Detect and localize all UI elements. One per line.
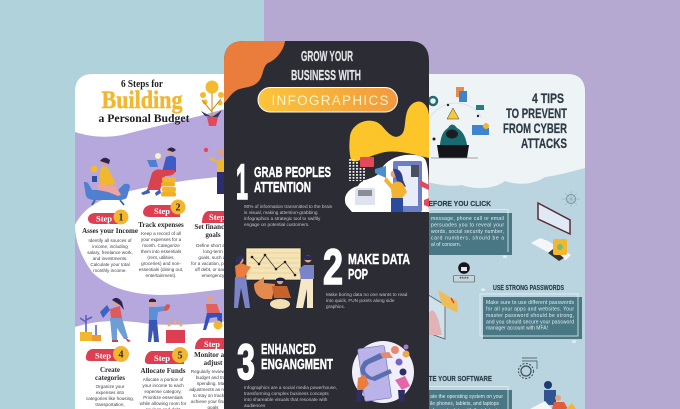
section 1 body text: 90% of information transmitted to the brain (244, 204, 333, 209)
illustration: woman with megaphone and phone (345, 155, 429, 212)
section 1 number and heading: GRAB PEOPLES (254, 164, 331, 181)
tip box: think before you click: message, phone call or email (431, 216, 504, 222)
illustration: woman with plants (80, 298, 131, 342)
step 2 text: groceries) and non- (141, 261, 181, 266)
title: grow your business with: BUSINESS WITH (291, 67, 361, 84)
step 4 text: Create (100, 366, 120, 374)
step 4 text: expenses into (96, 390, 125, 395)
tip box: think before you click: al of concern. (431, 242, 461, 248)
step 1 text: monthly income. (93, 268, 127, 273)
tip box: use strong passwords (480, 287, 582, 349)
tip box: use strong passwords: " (572, 339, 576, 349)
step 2 text: Keep a record of all (141, 231, 181, 236)
step 3 text: off debt, or saving (195, 267, 232, 272)
section 1 number and heading (236, 154, 331, 210)
step 5 text: Allocate Funds (141, 367, 186, 375)
step 5 text (140, 367, 187, 409)
tip box: use strong passwords: for all your apps and websites. Your (486, 306, 574, 312)
step 2 text: essentials (dining out, (139, 267, 183, 272)
step 3 text: goals, such as (198, 255, 228, 260)
step 1 badge: Step (96, 214, 112, 224)
title: 6 Steps for Building a Personal Budget: Building (102, 87, 183, 114)
panel: personal budget steps (75, 74, 237, 409)
icon: bulb (562, 191, 580, 207)
section 2 body text (326, 292, 408, 309)
step 2 text: Track expenses (138, 221, 184, 229)
step 4 badge: Step (95, 350, 111, 360)
section 1 number and heading: ATTENTION (254, 179, 311, 196)
step 6 badge (195, 338, 235, 349)
icon: gear (518, 358, 537, 378)
step 4 text: categories like housing, (86, 396, 134, 401)
illustration: monitor and laptop with lock (531, 203, 571, 261)
step 4 text: transportation, (95, 402, 125, 407)
step 6 text: achieve your financial (191, 399, 235, 404)
tip box: think before you click: card numbers, should be a (431, 236, 504, 242)
step 5 badge: 5 (178, 350, 182, 362)
illustration: person on coin (203, 296, 222, 330)
section 3 number and heading: 3 (237, 334, 255, 390)
title: 6 Steps for Building a Personal Budget: 6 Steps for (121, 79, 164, 90)
step 3 text: for a vacation, paying (191, 261, 235, 266)
step 3 badge: Step (209, 212, 225, 222)
section 1 body text: engage on potential customers. (244, 222, 309, 227)
step 4 text: Organize your (96, 384, 125, 389)
step 2 text: your expenses for a (141, 237, 182, 242)
step 1 text: Identify all sources of (88, 238, 132, 243)
step 4 badge (86, 346, 129, 362)
section 3 body text: audiences (244, 403, 266, 408)
step 4 badge: 4 (118, 350, 124, 360)
step 2 text: month. Categorize (142, 243, 180, 248)
panel: grow your business with infographics (224, 41, 429, 409)
illustration: hacker with laptop (429, 87, 489, 158)
step 2 text (138, 221, 184, 278)
step 6 badge: Step (204, 339, 220, 349)
step 2 badge: 2 (176, 202, 180, 214)
step 1 badge (88, 210, 128, 224)
step 1 text: Calculate your total (90, 262, 130, 267)
section 1 body text: infographics a strategic tool to swiftly (244, 216, 321, 221)
tip heading: use strong passwords: USE STRONG PASSWORDS (493, 285, 564, 292)
step 5 text: expense category. (144, 389, 182, 394)
tip heading: think before you click: THINK BEFORE YOU CLICK (401, 201, 491, 208)
step 5 text: your income to each (142, 383, 184, 388)
tip box: think before you click (412, 210, 512, 264)
section 1 number and heading: 1 (236, 154, 248, 210)
step 5 text: Prioritize essentials (143, 395, 183, 400)
step 6 text: to stay on track and (193, 393, 233, 398)
step 3 text: goals (205, 231, 221, 239)
icon: password lock (454, 262, 474, 283)
step 3 text: Set financial (194, 223, 232, 231)
step 2 text: entertainment). (146, 273, 176, 278)
step 5 text: while allowing room for (140, 401, 187, 406)
title: grow your business with (291, 48, 361, 84)
title: grow your business with: GROW YOUR (301, 48, 353, 65)
panel: cyber attack tips (401, 74, 585, 409)
step 6 text: adjust (204, 359, 223, 367)
section 1 body text: is visual, making attention-grabbing (244, 210, 318, 215)
orange corner blob (224, 41, 285, 103)
step 4 text: categories (95, 374, 125, 382)
title: 4 Tips to Prevent from Cyber Attacks: ATTACKS (521, 135, 567, 151)
title: 4 Tips to Prevent from Cyber Attacks: FROM CYBER (503, 120, 567, 136)
tip box: think before you click: persuades you to reveal your (431, 222, 504, 228)
illustration: woman on sofa (84, 158, 130, 205)
illustration: two people with line chart (234, 248, 314, 309)
section 3 number and heading (237, 334, 333, 390)
step 1 text: Asses your Income (82, 227, 138, 235)
step 6 text: budget and track (196, 375, 231, 380)
title pill: infographics (258, 88, 398, 112)
title: 4 Tips to Prevent from Cyber Attacks (503, 90, 567, 151)
tip box: update your software: ile phones, tablets, and laptops (430, 401, 499, 407)
icon: money plant (200, 80, 224, 126)
section 1 body text (244, 204, 333, 227)
step 1 badge: 1 (118, 212, 124, 224)
step 5 badge (145, 347, 188, 364)
title: 4 Tips to Prevent from Cyber Attacks: 4 TIPS (532, 90, 564, 106)
step 5 badge: Step (154, 353, 170, 363)
illustration: man with box of coins (148, 298, 185, 343)
step 3 text: emergency (202, 273, 225, 278)
step 1 text: and investments. (93, 256, 127, 261)
illustration: person with lightbulb (204, 148, 225, 194)
tip box: update your software (412, 386, 512, 409)
title pill: infographics: INFOGRAPHICS (272, 93, 388, 108)
section 3 body text: transforming complex business concepts (244, 391, 329, 396)
illustration: people with devices (530, 381, 576, 409)
step 5 text: Allocate a portion of (143, 377, 184, 382)
step 1 text (82, 227, 138, 273)
step 6 text: adjustments as needed (189, 387, 237, 392)
illustration: person on coins with laptop (141, 148, 176, 196)
step 2 badge: Step (154, 206, 170, 216)
illustration: monitor and envelope (420, 290, 458, 339)
step 6 text: spending. Make (197, 381, 230, 386)
step 2 text: (rent, utilities, (147, 255, 175, 260)
section 3 number and heading: ENGANGMENT (261, 356, 333, 373)
step 3 text: long-term (203, 249, 223, 254)
illustration: magnet and social media circle (352, 341, 414, 403)
step 3 badge (202, 211, 235, 223)
section 2 body text: into quick, FUN points along side (326, 298, 395, 303)
step 4 text (86, 366, 134, 407)
step 3 text: Define short and (196, 243, 230, 248)
tip box: use strong passwords: Make sure to use different passwords (486, 300, 574, 306)
tip box: use strong passwords: manager account with MFA! (486, 326, 548, 332)
section 2 body text: Make boring data no one wants to read (326, 292, 408, 297)
step 2 badge (143, 200, 186, 217)
step 1 text: income, including (92, 244, 128, 249)
tip box: think before you click: " (503, 254, 507, 264)
tip box: update your software: ate the operating system on your (430, 394, 503, 400)
step 6 text: Regularly review your (191, 369, 236, 374)
title: 6 Steps for Building a Personal Budget: a Personal Budget (98, 113, 190, 125)
section 2 number and heading: POP (348, 266, 368, 283)
yellow blob (349, 102, 429, 161)
section 3 body text: into shareable visuals that resonate with (244, 397, 328, 402)
section 3 body text: Infographics are a social media powerhouse, (244, 385, 337, 390)
tip box: think before you click: words, social security number, (431, 229, 504, 235)
title: 6 Steps for Building a Personal Budget (98, 79, 190, 125)
step 1 text: salary, freelance work, (87, 250, 133, 255)
step 6 text: Monitor and (194, 351, 232, 359)
section 3 number and heading: ENHANCED (261, 341, 316, 358)
tip heading: update your software: UPDATE YOUR SOFTWARE (412, 376, 492, 383)
title: 4 Tips to Prevent from Cyber Attacks: TO PREVENT (506, 105, 567, 121)
step 2 text: them into essentials (141, 249, 182, 254)
step 3 text (191, 223, 235, 278)
cloud-shaped light header (420, 74, 585, 188)
section 3 body text (244, 385, 337, 408)
step 6 text (189, 351, 237, 409)
section 2 number and heading (323, 239, 410, 295)
tip box: use strong passwords: and you should secure your password (486, 320, 574, 326)
tip box: use strong passwords: master password should be strong, (486, 313, 574, 319)
section 2 body text: graphics. (326, 304, 345, 309)
tip box: use strong passwords: " (481, 287, 485, 297)
section 2 number and heading: MAKE DATA (348, 251, 410, 268)
icon: password lock: **** (459, 277, 469, 283)
section 2 number and heading: 2 (323, 239, 343, 295)
purple wave band (75, 106, 235, 327)
